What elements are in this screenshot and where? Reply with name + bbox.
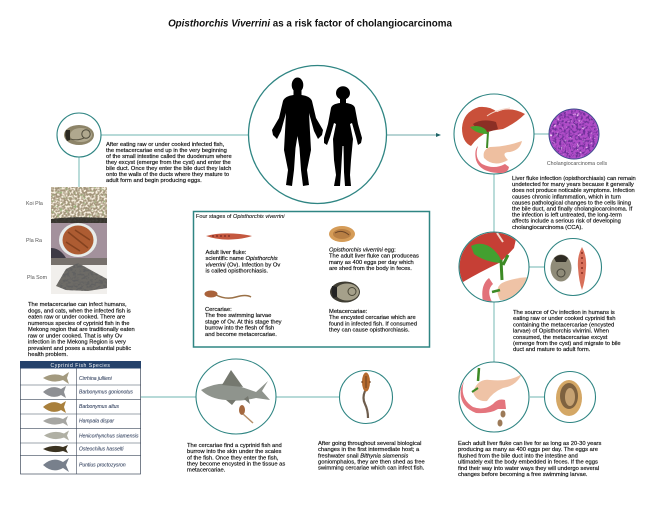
text: Ov egg [329,248,419,272]
text: first intermediate host: changes in the first intermediate host; a [318,447,420,453]
text: first intermediate host [318,441,425,472]
text: first intermediate host: After going throughout several biological [318,441,421,447]
text: chronic infection [512,176,636,231]
text: metacercariae: Metacercariae: [329,309,368,315]
text: adult lifespan and eggs [458,441,601,478]
text: chronic infection: Liver fluke infection (opisthorchiasis) can remain [512,176,636,182]
text: adult liver fluke: viverrini (Ov). Infection by Ov [206,262,280,268]
text: source of infection: containing the metacercariae (encysted [513,322,614,328]
panel heading: Four stages of Opisthorchis viverrini [196,214,285,220]
table header: Cyprinid Fish Species [51,363,110,369]
text: source of infection [513,310,621,353]
photo: Pla Ra [51,223,107,258]
text: cercariae: burrow into the flesh of fish [205,326,274,332]
text: cercariae burrow into fish: they become encysted in the tissue as [187,462,285,468]
icon: bile duct circle [455,230,530,302]
text: first intermediate host: goniomphalos, they are then shed as free [318,460,425,466]
food label: Koi Pla: Koi Pla [26,201,43,207]
text: source of infection: larvae) of Opisthorchis vivirrini. When [513,329,609,335]
text: infection in the Mekong region [28,302,135,358]
text: infection in the Mekong region: health problem. [28,352,68,358]
text: infection in the Mekong region: dogs, and cats, when the infected fish is [28,308,131,314]
icon: cholangiocarcinoma cells [549,109,599,159]
icon: human silhouettes circle [248,66,386,204]
text: infection in the Mekong region: eaten raw or under cooked. There are [28,315,125,321]
text: cercariae burrow into fish [187,443,285,474]
text: metacercariae: they can cause opisthorchiasis. [329,328,410,334]
photo: Koi Pla [51,187,107,223]
caption: cholangiocarcinoma cells: Cholangiocarcinoma cells [547,161,608,167]
text: infection in the Mekong region: infection in the Mekong Region is very [28,340,126,346]
text: Ov egg: Opisthorchis viverrini egg: [329,248,396,254]
text: metacercariae: The encysted cercariae which are [329,315,416,321]
text: adult lifespan and eggs: ultimately exit the body embedded in feces. If the eggs [458,460,598,466]
text: source of infection: consumed, the metacercariae excyst [513,335,608,341]
text: cercariae burrow into fish: burrow into the skin under the scales [187,449,282,455]
icon: man silhouette [272,78,323,186]
text: metacercariae [329,309,417,334]
text: chronic infection: cholangiocarcinoma (CCA). [512,225,583,231]
text: chronic infection: the bile duct, and finally cholangiocarcinoma. If [512,206,633,212]
photo: Pla Som [51,258,107,294]
arrow: humans to liver [436,133,441,137]
text: adult liver fluke: scientific name Opisthorchis [206,256,278,262]
icon: metacercariae [330,282,360,302]
text: Ov egg: many as 400 eggs per day which [329,260,414,266]
text: cercariae: The free swimming larvae [205,313,271,319]
title: Opisthorchis Viverrini as a risk factor of cholangiocarcinoma [168,18,452,30]
text: Ov egg: are shed from the body in feces. [329,266,412,272]
row: Henicorhynchus siamensis: Henicorhynchus siamensis [79,434,139,440]
icon: cercaria circle [340,370,392,424]
text: chronic infection: the infection is left untreated, the long-term [512,213,622,219]
row: Puntius proctozysron: Puntius proctozysron [79,462,126,468]
icon: Ov egg [329,226,355,242]
icon: woman silhouette [324,86,362,186]
text: source of infection: The source of Ov infection in humans is [513,310,615,316]
text: adult lifespan and eggs: find their way into water ways they will undergo several [458,466,599,472]
icon: pancreas and eggs circle [459,362,529,432]
row: Cirrhina jullieni: Cirrhina jullieni [79,376,113,382]
food label: Pla Ra: Pla Ra [26,238,42,244]
row: Barbonymus gonionotus: Barbonymus gonionotus [79,390,133,396]
text: adult lifespan and eggs: changes before becoming a free swimming larvae. [458,472,588,478]
icon: adult liver fluke [206,233,252,240]
text: infection in the Mekong region: The metacercariae can infect humans, [28,302,127,308]
text: chronic infection: does not produce noticable symptoms. Infection [512,188,635,194]
text: adult liver fluke [206,250,280,274]
row: Hampala dispar: Hampala dispar [79,418,114,424]
icon: cyst and adult fluke circle [544,238,602,296]
text: cercariae [205,307,282,338]
text: Ov egg: The adult liver fluke can produceas [329,254,419,260]
row: Osteochilus hasselti: Osteochilus hasselti [79,446,124,452]
text: cercariae: Cercariae: [205,307,232,313]
text: adult lifespan and eggs: Each adult liver fluke can live for as long as 20-30 years [458,441,601,447]
text: cercariae: stage of Ov. At this stage they [205,319,282,325]
connector lines [79,134,549,397]
text: cercariae: and become metacercariae. [205,332,277,338]
icon: cercariae [204,290,251,298]
text: source of infection: duct and mature to adult form. [513,347,591,353]
text: cercariae burrow into fish: of the fish. Once they enter the fish, [187,455,279,461]
text: cercariae burrow into fish: metacercariae. [187,468,226,474]
text: first intermediate host: swimming cercariae which can infect fish. [318,466,425,472]
text: metacercariae in the intestine: adult form and begin producing eggs. [106,178,202,184]
text: metacercariae: found in infected fish. If consumed [329,321,417,327]
text: infection in the Mekong region: prevalent and poses a substantial public [28,346,131,352]
text: metacercariae in the intestine: they excyst (emerge from the cyst) and enter the [106,160,231,166]
text: metacercariae in the intestine: bile duct. Once they enter the bile duct they latch [106,166,231,172]
text: infection in the Mekong region: numerous species of cyprinid fish in the [28,321,130,327]
text: source of infection: eating raw or under cooked cyprinid fish [513,316,615,322]
food label: Pla Som: Pla Som [27,275,48,281]
text: metacercariae in the intestine [106,142,232,184]
text: chronic infection: causes pathological changes to the cells lining [512,200,631,206]
text: metacercariae in the intestine: of the small intestine called the duodenum where [106,154,232,160]
text: cercariae burrow into fish: The cercariae find a cyprinid fish and [187,443,282,449]
text: chronic infection: causes chronic inflammation, which in turn [512,194,621,200]
text: adult lifespan and eggs: flushed from the bile duct into the intestine and [458,453,578,459]
text: infection in the Mekong region: Mekong region that are traditionally eaten [28,327,135,333]
text: source of infection: (emerge from the cyst) and migrate to bile [513,341,621,347]
icon: egg circle [544,372,596,422]
text: first intermediate host: freshwater snail Bithynia siamensis [318,453,408,459]
table: cyprinid fish species [20,361,141,474]
text: adult liver fluke: is called opisthorchiasis. [206,268,268,274]
text: adult lifespan and eggs: producing as many as 400 eggs per day. The eggs are [458,447,598,453]
text: infection in the Mekong region: raw or under cooked. That is why Ov [28,333,122,339]
icon: fish circle [196,359,276,434]
text: chronic infection: undetected for many years because it generally [512,182,634,188]
row: Barbonymus altus: Barbonymus altus [79,404,120,410]
text: metacercariae in the intestine: the metacercariae end up in the very beginning [106,148,227,154]
panel: four stages [194,212,430,347]
text: chronic infection: affects include a serious risk of developing [512,219,621,225]
text: adult liver fluke: Adult liver fluke: [206,250,247,256]
text: metacercariae in the intestine: onto the walls of the ducts where they mature to [106,172,229,178]
text: metacercariae in the intestine: After eating raw or under cooked infected fish, [106,142,225,148]
icon: liver and pancreas circle [454,94,534,174]
icon: metacercaria circle [57,113,101,157]
